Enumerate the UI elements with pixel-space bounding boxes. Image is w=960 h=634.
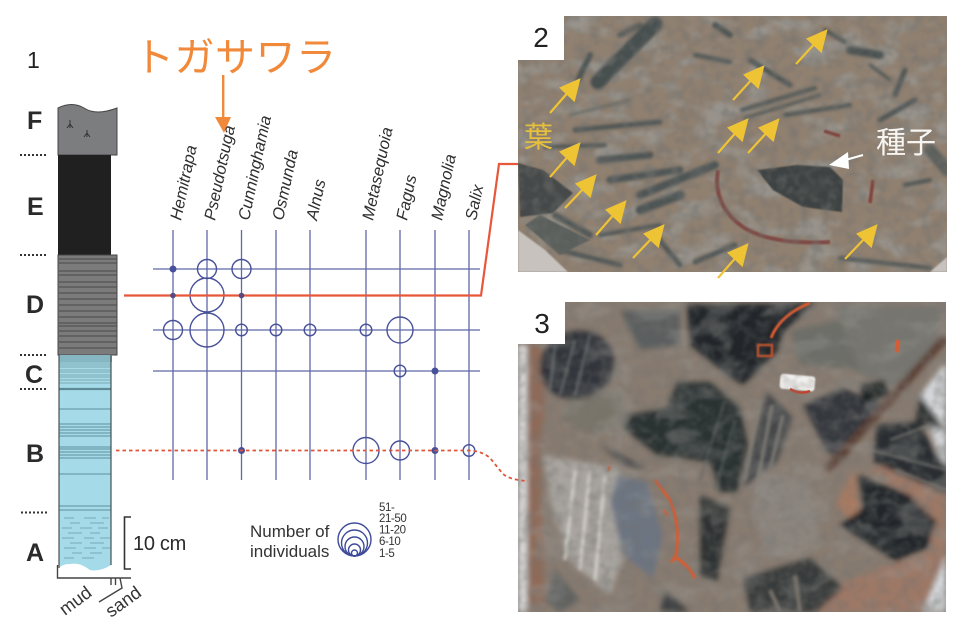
- legend label: individuals: [250, 542, 329, 561]
- layer E: [58, 155, 111, 255]
- occurrence row 3: [164, 313, 413, 347]
- legend label: [250, 522, 330, 561]
- panel number: 2: [517, 16, 564, 60]
- arrow: leaf 10: [796, 31, 826, 64]
- photo 2: fossil leaves and seed: [518, 16, 947, 272]
- label D: D: [26, 291, 44, 319]
- occurrence row 1: [170, 260, 251, 278]
- label: 種子 (seed): 種子: [876, 127, 936, 160]
- axis label: mud: mud: [55, 582, 95, 619]
- label: Hemitrapa: Hemitrapa: [167, 144, 201, 222]
- label: Fagus: Fagus: [393, 173, 420, 222]
- scale bar: 10 cm: [124, 517, 186, 569]
- scale bar: 10 cm: 10 cm: [133, 533, 186, 555]
- label: 葉 (leaf): 葉: [524, 121, 553, 154]
- arrow: leaf 4: [596, 202, 625, 235]
- row dots on connector: [170, 293, 244, 298]
- chart: fossil occurrence grid: [153, 230, 480, 480]
- title: トガサワラ: トガサワラ: [134, 36, 336, 80]
- label: Pseudotsuga: Pseudotsuga: [201, 124, 239, 222]
- arrow: leaf 5: [633, 226, 663, 258]
- panel number: 3: 3: [534, 308, 550, 339]
- connector: layer B to photo 3: [116, 450, 528, 481]
- panel number: 2: 2: [533, 22, 549, 53]
- photo 3: fossil leaf slab: [518, 302, 947, 612]
- panel: stratigraphic column: [58, 104, 131, 602]
- label: Salix: Salix: [462, 182, 488, 222]
- label B: B: [26, 440, 44, 468]
- arrow: leaf 1: [550, 80, 579, 113]
- legend values: 21-50: [379, 513, 406, 525]
- connector: layer D to photo 2: [124, 164, 518, 296]
- label: Osmunda: Osmunda: [269, 148, 302, 222]
- axis label: sand: sand: [102, 582, 145, 621]
- label: Cunninghamia: Cunninghamia: [235, 114, 275, 222]
- base axis: [58, 565, 131, 602]
- taxon labels: [167, 114, 488, 223]
- label: Alnus: Alnus: [303, 178, 329, 223]
- label E: E: [27, 193, 44, 221]
- legend values: 51-: [379, 502, 395, 514]
- arrow: title to Pseudotsuga: [215, 75, 231, 133]
- arrow: leaf 6: [718, 245, 747, 278]
- label F: F: [27, 107, 42, 135]
- arrow: seed pointer: [829, 152, 863, 169]
- occurrence row 2: [190, 278, 224, 312]
- legend: number of individuals: [250, 502, 406, 561]
- legend label: Number of: [250, 522, 330, 541]
- arrow: leaf 3: [565, 176, 595, 208]
- panel number: 3: [518, 302, 565, 344]
- layer labels and dotted boundaries: [20, 107, 48, 567]
- arrow: leaf 8: [748, 120, 778, 153]
- layer F: [58, 104, 117, 155]
- label: Magnolia: Magnolia: [428, 153, 460, 222]
- label A: A: [26, 539, 44, 567]
- arrows: yellow leaf pointers: [550, 31, 876, 278]
- legend values: 1-5: [379, 548, 394, 560]
- legend values: [379, 502, 406, 560]
- legend circles: [338, 523, 371, 556]
- legend values: 6-10: [379, 536, 400, 548]
- grid lines: [153, 230, 480, 480]
- label: Metasequoia: Metasequoia: [359, 126, 397, 222]
- photo 3 striping: [550, 335, 947, 612]
- arrow: leaf 2: [550, 144, 579, 177]
- panel 1 number: 1: [27, 47, 40, 73]
- arrow: leaf 9: [733, 67, 763, 100]
- label C: C: [25, 361, 43, 389]
- arrow: leaf 11: [845, 226, 876, 259]
- layers A to C: [59, 355, 112, 570]
- arrow: leaf 7: [718, 120, 747, 153]
- legend values: 11-20: [379, 524, 406, 536]
- occurrence row 4: [394, 365, 438, 377]
- occurrence row 5: [239, 438, 475, 464]
- layer D: [58, 255, 117, 355]
